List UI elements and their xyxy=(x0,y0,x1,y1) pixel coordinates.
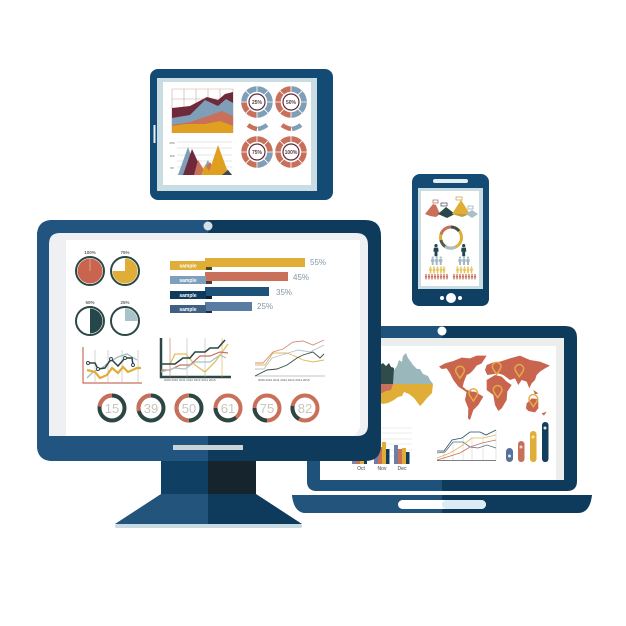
tablet area chart xyxy=(172,89,233,133)
horizontal bar chart: 55% xyxy=(310,258,326,267)
laptop line chart xyxy=(437,430,496,460)
tablet radial gauges: 75% xyxy=(252,150,263,156)
tablet xyxy=(150,69,333,200)
small line chart xyxy=(83,347,142,383)
horizontal bar chart: sample xyxy=(179,293,197,299)
horizontal bar chart: sample xyxy=(179,307,197,313)
tablet mountain chart: 250 xyxy=(169,141,175,145)
tablet radial gauges xyxy=(241,86,307,168)
monitor xyxy=(37,220,381,461)
map pins xyxy=(456,362,538,407)
donut gauges: 50 xyxy=(182,401,196,416)
tablet radial gauges: 100% xyxy=(285,150,298,156)
laptop xyxy=(292,326,592,513)
pie charts: 50% xyxy=(85,300,95,305)
tablet mountain chart: 150 xyxy=(169,154,175,158)
donut gauges: 82 xyxy=(298,401,312,416)
right line chart xyxy=(255,340,325,382)
phone mountain chart xyxy=(425,197,478,218)
pie charts: 25% xyxy=(120,300,130,305)
laptop bar chart xyxy=(352,428,412,472)
tablet radial gauges: 25% xyxy=(252,100,263,106)
laptop bar chart: Nov xyxy=(378,466,387,472)
horizontal bar chart: 25% xyxy=(257,302,273,311)
laptop bar chart: Oct xyxy=(357,466,365,472)
tablet radial gauges: 50% xyxy=(286,100,297,106)
donut gauges xyxy=(100,396,318,420)
right line chart: 2009 2010 2011 2012 2013 2014 2015 xyxy=(258,378,310,382)
tablet mountain chart: 50 xyxy=(170,166,174,170)
laptop bar chart: Dec xyxy=(398,466,407,472)
monitor stand xyxy=(115,455,302,528)
tablet mountain chart xyxy=(169,141,232,175)
world map xyxy=(439,356,550,420)
donut gauges: 15 xyxy=(105,401,119,416)
horizontal bar chart: sample xyxy=(179,278,197,284)
middle line chart xyxy=(161,338,231,382)
phone people icons xyxy=(425,244,476,279)
phone xyxy=(412,174,489,306)
laptop base xyxy=(292,495,592,513)
middle line chart: 2009 2010 2011 2012 2013 2014 2015 xyxy=(164,378,216,382)
horizontal bar chart: 35% xyxy=(276,288,292,297)
donut gauges: 75 xyxy=(260,401,274,416)
pie charts: 75% xyxy=(120,250,130,255)
horizontal bar chart: sample xyxy=(179,264,197,270)
phone donut xyxy=(440,227,462,248)
pie charts: 100% xyxy=(84,250,96,255)
donut gauges: 61 xyxy=(221,401,235,416)
laptop mirrored area chart xyxy=(380,353,433,406)
laptop pill bars xyxy=(506,422,548,462)
donut gauges: 39 xyxy=(144,401,158,416)
horizontal bar chart: 45% xyxy=(293,273,309,282)
pie charts xyxy=(76,250,139,335)
horizontal bar chart xyxy=(170,258,326,313)
